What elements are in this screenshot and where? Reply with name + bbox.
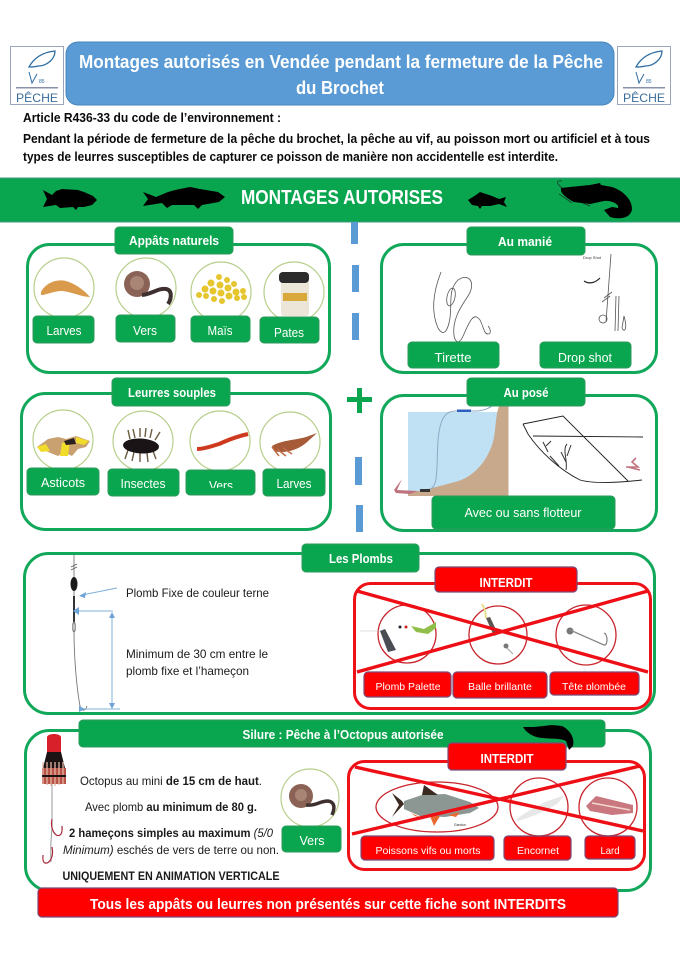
heading: Leurres souples	[128, 386, 216, 400]
label: poissons	[361, 836, 494, 860]
item: maïs	[191, 262, 251, 342]
item: maïs: Maïs	[208, 324, 232, 338]
label: encornet	[504, 836, 571, 860]
panel: au manié	[382, 227, 656, 372]
label: drop shot: Drop shot	[558, 351, 613, 365]
panel: interdit appâts	[348, 743, 644, 870]
drawing: tirette rig	[434, 272, 490, 342]
logo: left	[10, 46, 64, 105]
item: pates: Pates	[274, 326, 304, 340]
text: octopus rules: Avec plomb au minimum de 80 g.	[85, 800, 257, 814]
text: minimum 30 cm: Minimum de 30 cm entre le	[126, 647, 268, 661]
panel: silure	[26, 720, 650, 890]
item: larves: Larves	[46, 324, 82, 338]
item: insectes: Insectes	[120, 477, 166, 491]
icon: perch silhouette	[468, 192, 507, 209]
item: pates	[260, 262, 324, 343]
drawing: drop shot rig	[583, 254, 626, 331]
item: asticots	[27, 410, 99, 495]
label: lard	[585, 836, 635, 859]
heading: Au posé	[504, 386, 549, 400]
text: minimum 30 cm	[126, 647, 268, 678]
item: asticots: Asticots	[41, 476, 85, 490]
heading	[79, 720, 605, 747]
heading	[115, 227, 233, 254]
label: avec ou sans flotteur: Avec ou sans flotteur	[464, 506, 582, 520]
logo: right: 85	[646, 79, 652, 85]
label: balle brillante	[453, 672, 547, 698]
item: vers	[281, 769, 341, 852]
item: larves	[33, 258, 94, 343]
text: octopus rules	[62, 774, 280, 883]
text: octopus rules: UNIQUEMENT EN ANIMATION VERTICALE	[62, 869, 280, 883]
heading: Au manié	[498, 235, 552, 249]
item: vers rouges	[186, 411, 255, 495]
icon: zander silhouette	[143, 187, 225, 209]
label: encornet: Encornet	[517, 845, 559, 857]
article text: types de leurres susceptibles de capturer ce poisson de manière non accidentelle est interdite.	[23, 150, 558, 164]
label: poissons: Poissons vifs ou morts	[376, 845, 480, 857]
article text	[23, 111, 650, 164]
heading: INTERDIT	[480, 752, 534, 766]
text: octopus rules: Minimum) eschés de vers de terre ou non.	[63, 843, 279, 857]
label: plomb palette: Plomb Palette	[376, 681, 441, 693]
item: vers	[116, 258, 176, 342]
heading: Appâts naturels	[129, 234, 219, 248]
center dashed divider	[351, 222, 363, 532]
heading	[112, 378, 230, 406]
heading	[448, 743, 566, 770]
item: insectes	[108, 411, 179, 496]
item: vers: Vers	[300, 834, 324, 848]
heading	[435, 567, 577, 592]
banner heading: MONTAGES AUTORISES	[241, 187, 443, 209]
heading: Les Plombs	[329, 552, 393, 566]
title: Montages autorisés en Vendée pendant la fermeture de la Pêche	[79, 52, 603, 72]
cross	[357, 591, 648, 672]
cross	[352, 766, 643, 834]
footer warning	[38, 888, 618, 917]
title: du Brochet	[296, 78, 384, 98]
text: octopus rules: Octopus au mini de 15 cm de haut.	[80, 774, 262, 788]
plus sign	[347, 388, 372, 413]
drawing: bottom sketch	[523, 416, 643, 483]
arrow: sinker	[79, 588, 117, 598]
images: Gardon	[454, 823, 466, 827]
label: drop shot	[540, 342, 631, 368]
icon: catfish	[523, 725, 573, 750]
drawing: rig with sinker	[70, 555, 87, 710]
label: avec ou sans flotteur	[432, 496, 615, 529]
banner: montages autorises	[0, 178, 680, 222]
item: larves souples: Larves	[276, 477, 312, 491]
panel: leurres souples	[22, 378, 330, 530]
item: vers rouges: Vers	[209, 479, 233, 493]
heading: INTERDIT	[480, 576, 533, 590]
item: larves souples	[260, 412, 325, 496]
label: balle brillante: Balle brillante	[468, 681, 532, 693]
panel: les plombs	[24, 544, 654, 714]
item: vers: Vers	[133, 324, 157, 338]
label: tirette: Tirette	[434, 351, 472, 365]
heading	[467, 378, 585, 406]
title	[66, 42, 614, 105]
heading	[467, 227, 585, 255]
heading: Silure : Pêche à l’Octopus autorisée	[242, 728, 444, 742]
icon: catfish silhouette	[558, 181, 632, 218]
label: tête plombée	[550, 672, 639, 695]
logo: left: 85	[39, 79, 45, 85]
label: plomb palette	[364, 672, 451, 697]
article text: Pendant la période de fermeture de la pêche du brochet, la pêche au vif, au poisson mort ou artificiel et à tous	[23, 132, 650, 146]
drawing: tirette hook loop	[445, 287, 457, 307]
panel: au posé	[382, 378, 656, 530]
article text: Article R436-33 du code de l’environnement :	[23, 111, 281, 125]
arrow: minimum distance	[73, 607, 120, 712]
panel: appâts naturels	[28, 227, 330, 372]
icon: bass silhouette	[43, 189, 97, 210]
text: octopus rules: 2 hameçons simples au maximum (5/0	[69, 826, 273, 840]
heading	[302, 544, 419, 572]
drawing: drop shot rig: Drop Shot	[583, 255, 602, 260]
footer warning: Tous les appâts ou leurres non présentés sur cette fiche sont INTERDITS	[90, 897, 566, 913]
label: tirette	[408, 342, 499, 368]
logo: left: PÊCHE	[16, 90, 58, 105]
panel: interdit plombs	[354, 567, 650, 708]
images	[376, 778, 637, 836]
text: minimum 30 cm: plomb fixe et l’hameçon	[126, 664, 249, 678]
logo: right: PÊCHE	[623, 90, 665, 105]
label: tête plombée: Tête plombée	[562, 681, 626, 693]
label: lard: Lard	[600, 845, 620, 857]
icon: octopus lure	[42, 734, 66, 863]
drawing: water and bank	[394, 405, 508, 496]
text: plomb fixe: Plomb Fixe de couleur terne	[126, 586, 269, 600]
circles and images	[360, 604, 616, 665]
logo: right	[618, 46, 670, 105]
